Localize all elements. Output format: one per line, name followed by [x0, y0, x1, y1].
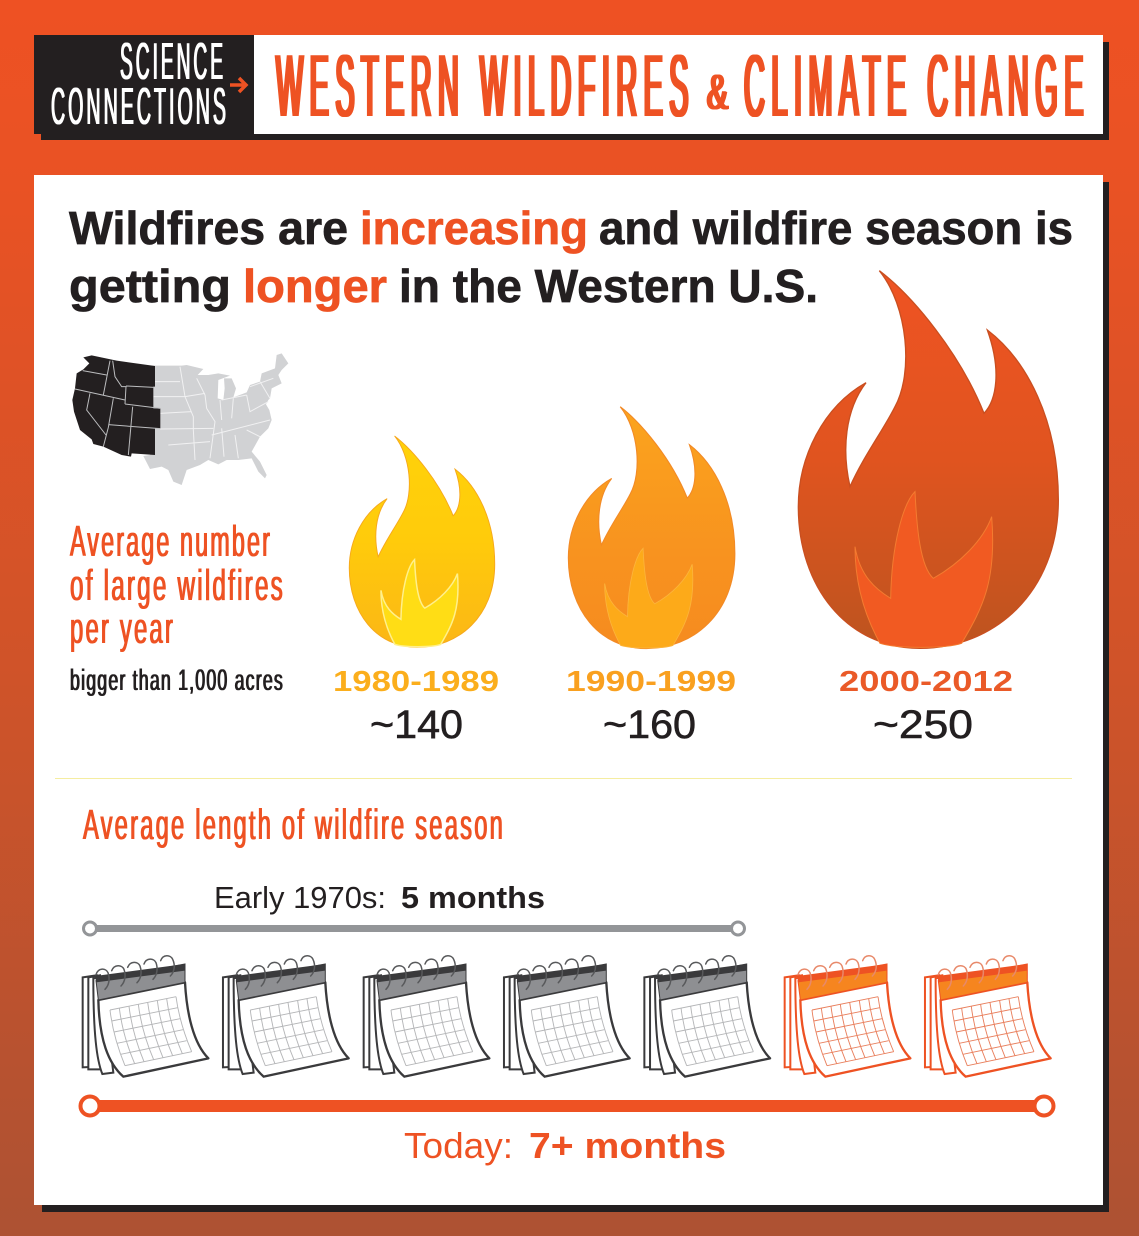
today label: [404, 1125, 726, 1166]
calendar 4: [504, 956, 630, 1077]
headline: in the Western U.S.: [399, 260, 818, 312]
main panel: [34, 175, 1109, 1212]
flame 2000-2012: [798, 271, 1058, 648]
today range bar: [80, 1096, 1054, 1116]
early 1970s range bar: [84, 922, 744, 935]
flame 1990-1999: [568, 407, 735, 649]
stat: 1980-1989: [333, 666, 499, 747]
season length heading: Average length of wildfire season: [83, 801, 505, 849]
stat: 2000-2012: ~250: [873, 703, 973, 747]
stat: 1990-1999: [566, 666, 736, 747]
headline: getting: [69, 260, 231, 312]
calendar 1: [83, 956, 208, 1077]
series label: [51, 33, 229, 136]
stat: 2000-2012: [839, 666, 1013, 747]
western states: [72, 355, 160, 457]
stat: 2000-2012: 2000-2012: [839, 666, 1013, 698]
stat: 1990-1999: ~160: [603, 703, 696, 747]
early 1970s label: Early 1970s:: [214, 880, 386, 915]
headline: [69, 202, 1073, 312]
headline: and wildfire season is: [599, 202, 1073, 254]
calendar 5: [644, 956, 770, 1077]
caption: average number of wildfires: of large wildfires: [70, 561, 285, 610]
flame 1980-1989: [349, 436, 495, 647]
caption: average number of wildfires: per year: [70, 604, 175, 653]
header banner: [34, 33, 1109, 140]
calendar row: orange months: [785, 956, 1051, 1077]
early 1970s label: 5 months: [401, 880, 545, 915]
US map: [72, 353, 288, 485]
calendar row: gray months: [83, 956, 770, 1077]
calendar 7: [925, 956, 1051, 1077]
stat: 1980-1989: 1980-1989: [333, 666, 499, 698]
stat: 1980-1989: ~140: [370, 703, 463, 747]
caption: average number of wildfires: [70, 517, 285, 697]
caption: average number of wildfires: Average number: [70, 517, 272, 566]
today label: Today:: [404, 1125, 513, 1166]
stat: 1990-1999: 1990-1999: [566, 666, 736, 698]
caption: average number of wildfires: bigger than 1,000 acres: [70, 664, 284, 697]
headline: Wildfires are: [69, 202, 348, 254]
header banner: CONNECTIONS: [51, 78, 229, 136]
title: &: [707, 64, 728, 120]
calendar 2: [223, 956, 349, 1077]
today label: 7+ months: [529, 1125, 726, 1166]
eastern states: [143, 353, 288, 485]
header banner: SCIENCE: [120, 33, 226, 91]
calendar 3: [364, 956, 489, 1077]
early 1970s label: [214, 880, 545, 915]
headline: increasing: [360, 202, 588, 254]
calendar 6: [785, 956, 910, 1077]
headline: longer: [243, 260, 387, 312]
arrow: [230, 78, 246, 92]
